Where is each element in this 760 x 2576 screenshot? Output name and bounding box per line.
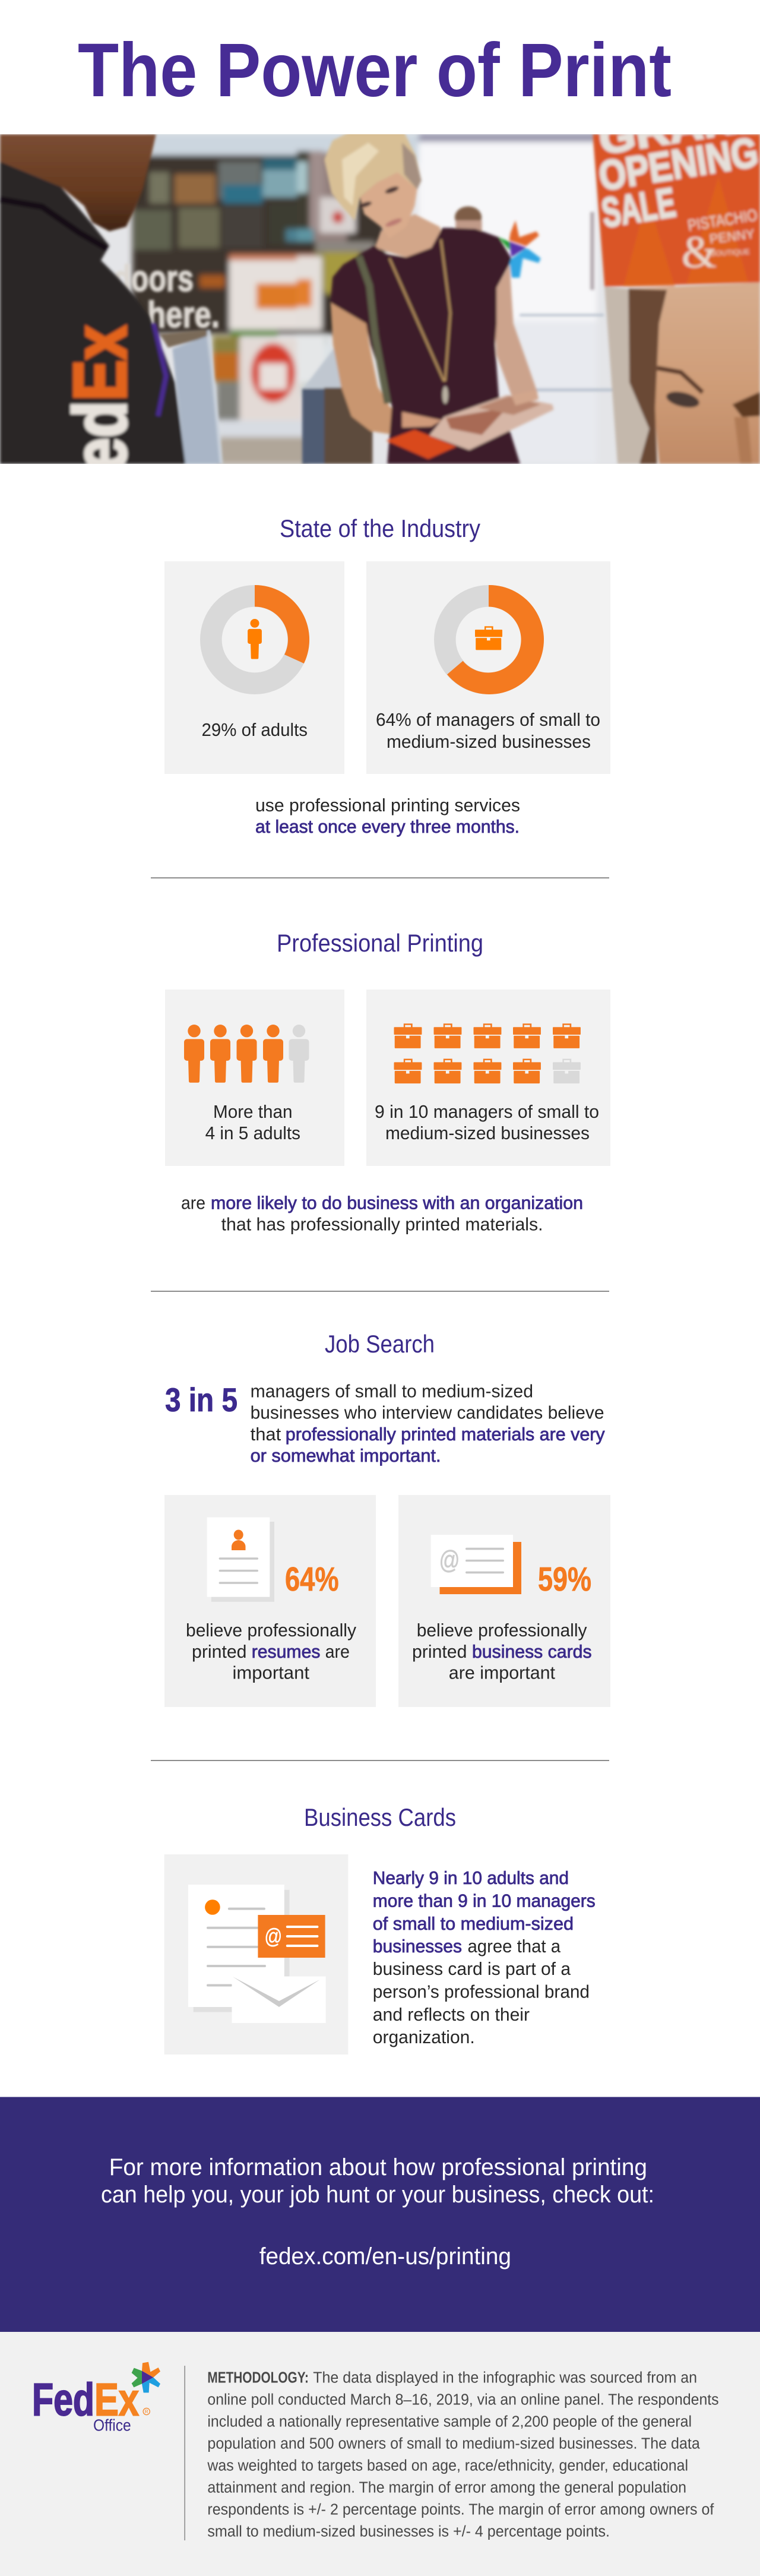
- text: business card statement: and reflects on their: [373, 2005, 530, 2025]
- text: 9 in 10 managers: [375, 1102, 599, 1143]
- text: more than 4 in 5 adults: 4 in 5 adults: [205, 1123, 300, 1143]
- photo: blurred window lettering: here.: [147, 295, 220, 336]
- text: 29% of adults: 29% of adults: [202, 720, 308, 740]
- photo: FedEx sleeve lettering: [68, 322, 131, 464]
- photo: FedEx sleeve lettering: Fed: [58, 401, 142, 508]
- photo background: store window: [132, 134, 597, 464]
- text: methodology: online poll conducted March 8–16, 2019, via an online panel. The respondents: [207, 2391, 719, 2408]
- text: 9 in 10 managers: 9 in 10 managers of small to: [375, 1102, 599, 1122]
- text: business cards are important: [412, 1620, 592, 1683]
- photo: man in FedEx uniform: [0, 134, 185, 464]
- photo: blurred window lettering: [115, 264, 220, 330]
- text: managers who interview candidates: businesses who interview candidates believe: [251, 1403, 604, 1423]
- donut chart: 64%: [445, 585, 544, 694]
- photo: kiosks, woman, man and poster: SALE: [598, 179, 679, 236]
- panel: 9 in 10 managers: [366, 990, 610, 1166]
- text: business cards are important: believe professionally: [417, 1620, 587, 1641]
- panel: resumes: [164, 1495, 376, 1707]
- text: business cards are important: printed: [412, 1642, 467, 1662]
- text: more than 4 in 5 adults: More than: [213, 1102, 292, 1122]
- text: methodology: attainment and region. The margin of error among the general population: [207, 2480, 686, 2496]
- footer: methodology panel: [0, 2332, 760, 2576]
- text: business card statement: businesses: [373, 1936, 462, 1957]
- icon: orange contact card: [258, 1915, 325, 1958]
- banner: call to action: For more information about how professional printing: [109, 2154, 647, 2180]
- text: business card statement: more than 9 in 10 managers: [373, 1891, 596, 1911]
- text: resumes are important: [186, 1620, 357, 1683]
- photo: FedEx sleeve lettering: Ex: [58, 325, 142, 401]
- panel: more than 4 in 5 adults: [165, 990, 344, 1166]
- text: methodology: included a nationally representative sample of 2,200 people of the general: [207, 2414, 692, 2430]
- title: The Power of Print: [78, 28, 672, 113]
- text: managers who interview candidates: that: [251, 1424, 281, 1445]
- icon: envelope: [232, 1977, 326, 2023]
- icon: business card: @: [439, 1545, 460, 1575]
- text: 64% of managers: 64% of managers of small to: [376, 710, 600, 730]
- icon: person: [248, 619, 262, 659]
- text: resumes are important: believe professionally: [186, 1620, 357, 1641]
- text: managers who interview candidates: [251, 1382, 605, 1466]
- hero photo: store scene: [0, 134, 760, 464]
- stat: 59%: 59%: [538, 1560, 591, 1598]
- text: business card statement: business card is part of a: [373, 1959, 571, 1979]
- panel: 64% of managers: [366, 561, 610, 774]
- text: more likely to do business: are: [181, 1193, 205, 1213]
- heading: Job Search: Job Search: [325, 1330, 435, 1358]
- text: managers who interview candidates: or somewhat important.: [251, 1446, 441, 1466]
- text: methodology: population and 500 owners of small to medium-sized businesses. The data: [207, 2435, 701, 2452]
- logo: FedEx Office: Fed: [32, 2375, 94, 2426]
- text: business card statement: of small to medium-sized: [373, 1914, 574, 1934]
- text: managers who interview candidates: professionally printed materials are very: [286, 1424, 605, 1445]
- stat: 3 in 5: 3 in 5: [165, 1381, 238, 1418]
- panel: stationery illustration: [164, 1854, 348, 2055]
- text: methodology: [207, 2370, 719, 2540]
- icon row: five people: [184, 1025, 309, 1083]
- photo: kiosks, woman, man and poster: BOUTIQUE: [710, 248, 750, 258]
- icon: orange contact card: @: [264, 1924, 282, 1948]
- photo: kiosks, woman, man and poster: GRAND: [596, 90, 760, 163]
- banner: call to action: [0, 2097, 760, 2332]
- text: resumes are important: resumes: [252, 1642, 321, 1662]
- text: business card statement: [373, 1868, 596, 2047]
- text: more than 4 in 5 adults: [205, 1102, 300, 1143]
- text: 64% of managers: medium-sized businesses: [387, 732, 591, 752]
- heading: State of the Industry: State of the Industry: [280, 514, 480, 542]
- logo: FedEx Office: R: [145, 2409, 148, 2414]
- logo: FedEx Office: Office: [93, 2416, 131, 2435]
- donut chart: 29%: [211, 585, 309, 684]
- heading: Professional Printing: Professional Printing: [277, 929, 483, 957]
- photo: kiosks, woman, man and poster: &: [682, 227, 717, 277]
- panel: 29% of adults: [164, 561, 344, 774]
- stat: 64%: 64%: [285, 1560, 339, 1598]
- text: methodology: small to medium-sized businesses is +/- 4 percentage points.: [207, 2524, 610, 2540]
- text: more likely to do business: that has professionally printed materials.: [221, 1214, 543, 1234]
- text: business cards are important: are important: [449, 1663, 556, 1683]
- text: printing frequency: use professional printing services: [255, 795, 520, 816]
- icon grid: ten briefcases: [394, 1023, 581, 1083]
- text: business card statement: Nearly 9 in 10 adults and: [373, 1868, 569, 1888]
- photo: kiosks, woman, man and poster: PENNY: [709, 226, 755, 246]
- icon: business card: [431, 1535, 521, 1594]
- text: methodology: was weighted to targets based on age, race/ethnicity, gender, educational: [207, 2458, 688, 2474]
- text: printing frequency: [255, 795, 520, 837]
- text: 64% of managers: [376, 710, 600, 752]
- text: 9 in 10 managers: medium-sized businesses: [385, 1123, 590, 1143]
- text: more likely to do business: more likely to do business with an organization: [211, 1193, 583, 1213]
- text: business card statement: organization.: [373, 2027, 475, 2047]
- photo: kiosks, woman, man and poster: [0, 134, 760, 464]
- text: business cards are important: business cards: [472, 1642, 592, 1662]
- icon: resume: [207, 1518, 274, 1602]
- text: resumes are important: important: [233, 1663, 310, 1683]
- icon: briefcase: [475, 626, 502, 650]
- banner: call to action: fedex.com/en-us/printing: [259, 2243, 511, 2270]
- heading: Business Cards: Business Cards: [304, 1803, 456, 1831]
- text: printing frequency: at least once every three months.: [255, 817, 520, 837]
- text: resumes are important: printed: [192, 1642, 247, 1662]
- text: methodology: METHODOLOGY:: [207, 2370, 309, 2387]
- text: business card statement: person’s professional brand: [373, 1982, 590, 2002]
- panel: business cards: [398, 1495, 610, 1707]
- text: managers who interview candidates: managers of small to medium-sized: [251, 1382, 533, 1402]
- logo: FedEx Office: [32, 2362, 160, 2435]
- text: more likely to do business: [181, 1193, 583, 1234]
- text: methodology: The data displayed in the infographic was sourced from an: [313, 2370, 697, 2387]
- text: resumes are important: are: [325, 1642, 350, 1662]
- logo: FedEx Office: Ex: [94, 2375, 139, 2426]
- text: methodology: respondents is +/- 2 percentage points. The margin of error among owners of: [207, 2502, 714, 2518]
- photo: poster: [593, 134, 760, 464]
- icon: letter document: [188, 1885, 290, 2012]
- photo: blurred window lettering: doors: [113, 258, 194, 299]
- banner: call to action: can help you, your job hunt or your business, check out:: [101, 2182, 654, 2208]
- text: business card statement: agree that a: [468, 1936, 560, 1957]
